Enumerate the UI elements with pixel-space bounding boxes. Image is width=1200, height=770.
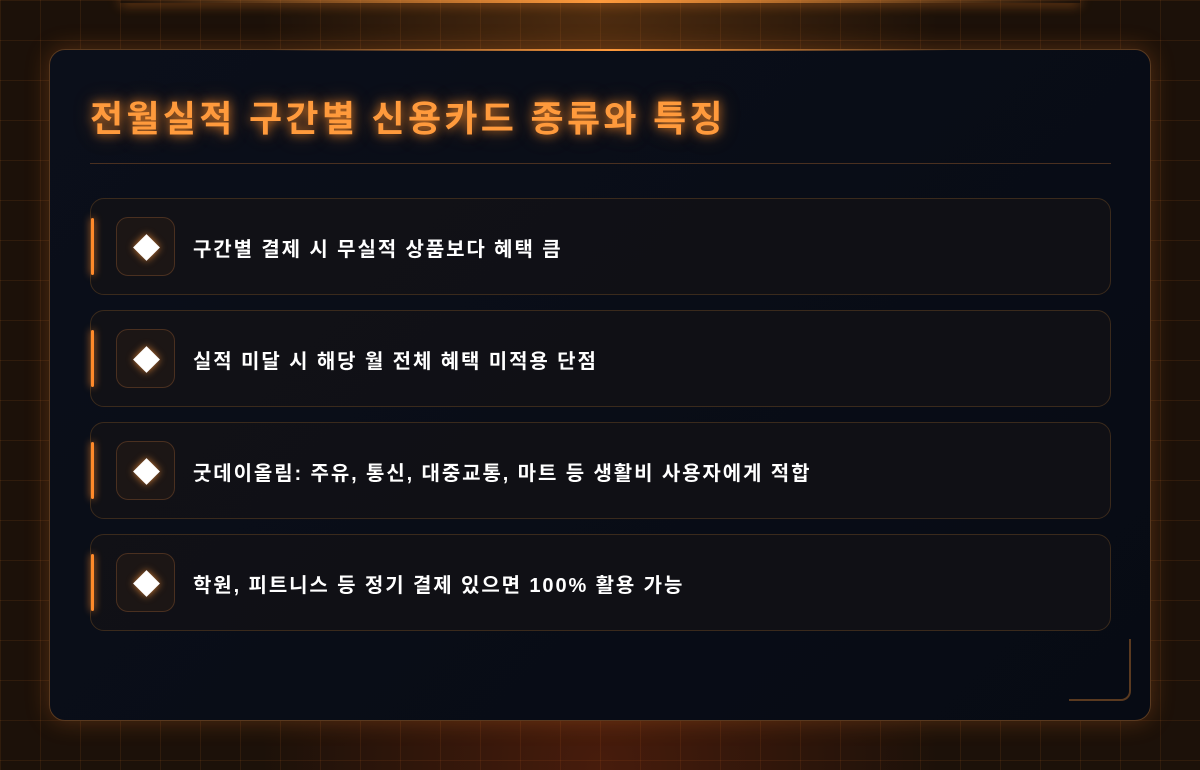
text 2: 실적 미달 시 해당 월 전체 혜택 미적용 단점 — [193, 351, 598, 373]
text 3: 굿데이올림: 주유, 통신, 대중교통, 마트 등 생활비 사용자에게 적합 — [193, 463, 811, 485]
icon: diamond — [116, 217, 175, 276]
item 3 — [90, 422, 1111, 519]
text 4: 학원, 피트니스 등 정기 결제 있으면 100% 활용 가능 — [193, 575, 684, 597]
text 1: 구간별 결제 시 무실적 상품보다 혜택 큼 — [193, 239, 563, 261]
item 1 — [90, 198, 1111, 295]
title: 전월실적 구간별 신용카드 종류와 특징 — [90, 98, 726, 139]
icon: diamond — [116, 441, 175, 500]
icon: diamond — [116, 553, 175, 612]
item 2 — [90, 310, 1111, 407]
item 4 — [90, 534, 1111, 631]
icon: diamond — [116, 329, 175, 388]
